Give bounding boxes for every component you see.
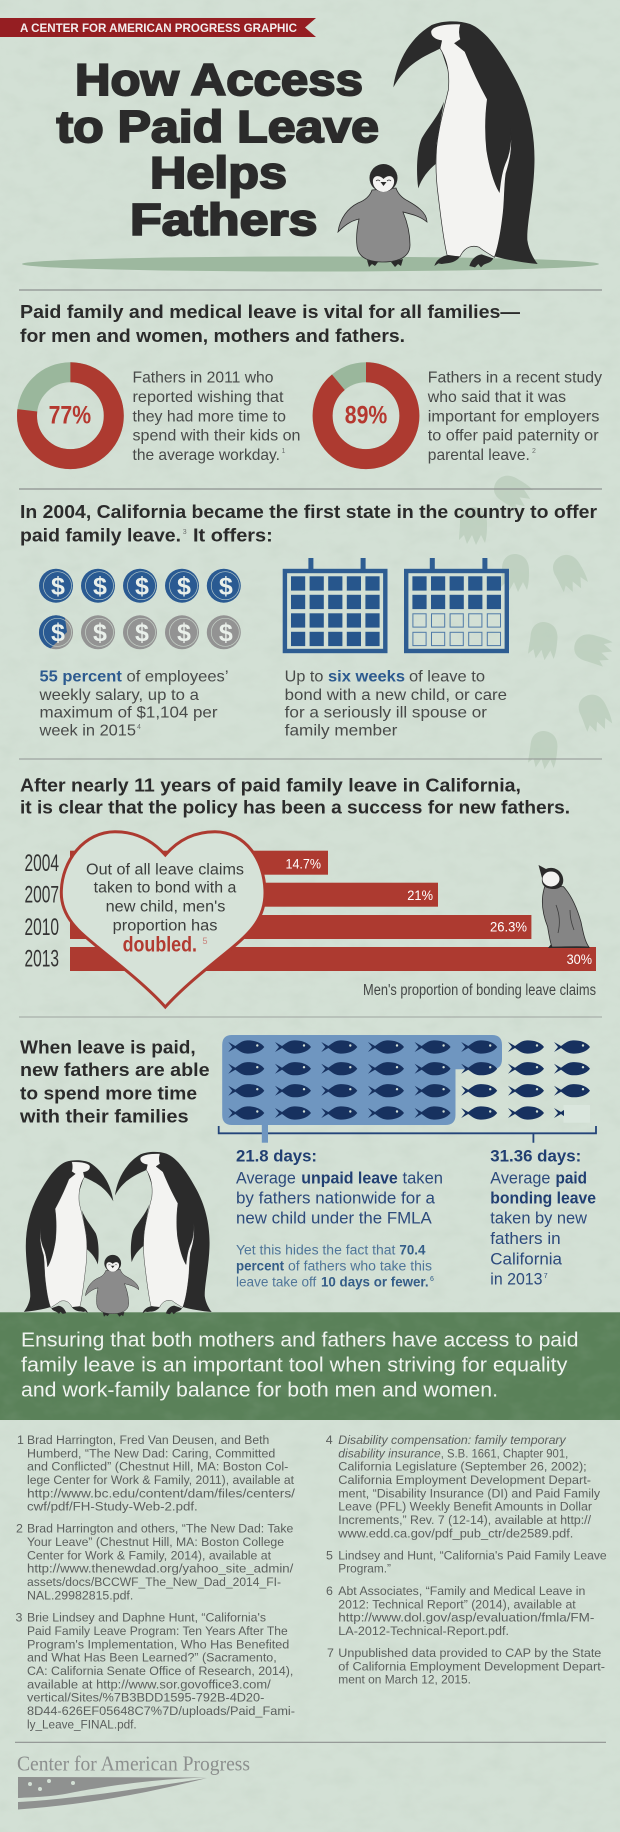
callout: heart: Out of all leave claims: [86, 861, 244, 878]
callout: heart: doubled.: [123, 934, 197, 957]
footnotes: right column: Abt Associates, “Family and Medical Leave in: [338, 1584, 585, 1598]
bar chart: men's proportion of bonding leave claims: 2007: [24, 882, 59, 909]
text: 89% description: to offer paid paternity or: [428, 428, 599, 445]
bar chart: men's proportion of bonding leave claims: 14.7%: [286, 855, 321, 871]
bar chart: men's proportion of bonding leave claims: 30%: [567, 951, 592, 967]
text: 89% description: 2: [532, 448, 536, 455]
text: 21.8 days unpaid leave: new child under the FMLA: [236, 1210, 432, 1228]
ribbon: source label: A CENTER FOR AMERICAN PROGRESS GRAPHIC: [20, 21, 297, 35]
footnotes: right column: of California Employment Development Depart-: [338, 1659, 605, 1673]
text: 21.8 days unpaid leave: by fathers nationwide for a: [236, 1189, 436, 1207]
text: 55 percent of salary: of employees’: [126, 669, 228, 686]
ribbon: source label: [0, 18, 316, 37]
text: 77% description: spend with their kids on: [132, 428, 300, 445]
icon: coins showing 55 percent: $: [51, 572, 65, 600]
footnotes: right column: Increments,” Rev. 7 (12-14), available at http://: [338, 1513, 592, 1527]
bar chart: men's proportion of bonding leave claims: 2004: [24, 850, 59, 877]
text: 77% description: they had more time to: [132, 408, 286, 425]
heading: policy success: it is clear that the policy has been a success for new fathers.: [20, 797, 570, 817]
heading: paid leave is vital: for men and women, mothers and fathers.: [20, 326, 405, 346]
footnotes: left column: http://www.thenewdad.org/yahoo_site_admin/: [27, 1562, 294, 1576]
text: six weeks of leave: of leave to: [409, 669, 485, 686]
bracket: fish scale: [219, 1125, 596, 1143]
icon: full calendar: [285, 558, 385, 651]
heading: when leave is paid: with their families: [19, 1106, 189, 1126]
text: six weeks of leave: family member: [285, 723, 398, 740]
logo: Center for American Progress: [17, 1752, 250, 1810]
bar chart: men's proportion of bonding leave claims: 2010: [24, 914, 59, 941]
text: 70.4 percent note: leave take off: [236, 1275, 317, 1290]
bar chart: men's proportion of bonding leave claims: [24, 850, 596, 973]
footnotes: left column: 2: [16, 1522, 23, 1536]
bar chart: men's proportion of bonding leave claims: 26.3%: [490, 919, 527, 935]
text: 55 percent of salary: [38, 669, 228, 740]
text: 31.36 days paid leave: Average: [490, 1169, 550, 1187]
footnotes: left column: available at http://www.sor.govoffice3.com/: [27, 1677, 271, 1691]
text: 31.36 days paid leave: fathers in: [490, 1230, 561, 1248]
text: 77% description: reported wishing that: [132, 389, 284, 406]
icon: coins showing 55 percent: $: [135, 619, 149, 647]
footnotes: left column: http://www.bc.edu/content/dam/files/centers/: [27, 1486, 296, 1500]
text: 70.4 percent note: Yet this hides the fact that: [236, 1242, 396, 1257]
text: six weeks of leave: Up to: [285, 669, 323, 686]
footnotes: right column: 2012: Technical Report” (2014), available at: [338, 1597, 576, 1611]
heading: California first state: In 2004, California became the first state in the country to offer: [20, 502, 597, 522]
text: 21.8 days unpaid leave: Average: [236, 1169, 296, 1187]
text: 70.4 percent note: 10 days or fewer.: [321, 1275, 429, 1290]
text: 70.4 percent note: 6: [430, 1276, 434, 1283]
text: 77% description: 1: [282, 448, 286, 455]
text: 70.4 percent note: 70.4: [399, 1242, 426, 1257]
callout: heart: 5: [202, 936, 208, 946]
text: 21.8 days unpaid leave: unpaid leave: [301, 1169, 398, 1187]
text: 89% description: important for employers: [428, 408, 599, 425]
panel: green conclusion band: family leave is an important tool when striving for equality: [21, 1355, 567, 1377]
footnotes: right column: ment on March 12, 2015.: [338, 1673, 471, 1687]
footnotes: left column: lege Center for Work & Family, 2011), available at: [27, 1473, 295, 1487]
footnotes: left column: Your Leave” (Chestnut Hill, MA: Boston College: [27, 1535, 284, 1549]
footnotes: right column: , S.B. 1661, Chapter 901,: [441, 1446, 568, 1460]
footnotes: left column: and Conflicted” (Chestnut Hill, MA: Boston Col-: [27, 1460, 288, 1474]
text: 55 percent of salary: weekly salary, up to a: [38, 687, 199, 704]
text: 89% description: [427, 370, 602, 464]
footnotes: left column: 8D44-626EF05648C7%7D/uploads/Paid_Fami-: [27, 1704, 295, 1718]
footnotes: right column: Program.”: [338, 1562, 391, 1576]
heading: California first state: [20, 502, 597, 546]
footnotes: left column: [16, 1433, 296, 1731]
panel: green conclusion band: and work-family balance for both men and women.: [21, 1380, 498, 1402]
icon: coins showing 55 percent: $: [177, 572, 191, 600]
donut chart: 89%: 89%: [345, 401, 387, 429]
footnotes: left column: vertical/Sites/%7B3BDD1595-792B-4D20-: [27, 1691, 264, 1705]
text: 77% description: Fathers in 2011 who: [132, 370, 274, 387]
title: [56, 56, 379, 245]
callout: heart: [61, 832, 265, 1007]
footnotes: left column: Paid Family Leave Program: Ten Years After The: [27, 1624, 288, 1638]
text: 55 percent of salary: 4: [137, 724, 141, 731]
heading: policy success: [20, 776, 570, 817]
footnotes: left column: cwf/pdf/FH-Study-Web-2.pdf.: [27, 1500, 198, 1514]
footnotes: right column: [326, 1433, 607, 1687]
title: to Paid Leave: [56, 103, 379, 152]
footnotes: left column: NAL.29982815.pdf.: [27, 1588, 133, 1602]
footnotes: right column: http://www.dol.gov/asp/evaluation/fmla/FM-: [338, 1611, 594, 1625]
logo: Center for American Progress: Center for American Progress: [17, 1752, 250, 1776]
icon: penguin chick looking up: [538, 865, 590, 948]
footnotes: left column: Program's Implementation, Who Has Benefited: [27, 1637, 289, 1651]
footnotes: left column: Center for Work & Family, 2014), available at: [27, 1548, 272, 1562]
text: 31.36 days paid leave: taken by new: [490, 1210, 587, 1228]
heading: when leave is paid: to spend more time: [20, 1083, 197, 1103]
footnotes: left column: assets/docs/BCCWF_The_New_Dad_2014_FI-: [27, 1575, 281, 1589]
text: 21.8 days unpaid leave: taken: [402, 1169, 443, 1187]
text: 55 percent of salary: maximum of $1,104 per: [40, 705, 218, 722]
footnotes: left column: Humberd, “The New Dad: Caring, Committed: [27, 1446, 275, 1460]
text: 77% description: the average workday.: [132, 447, 280, 464]
icon: coins showing 55 percent: $: [219, 572, 233, 600]
footnotes: right column: Disability compensation: family temporary: [338, 1433, 566, 1447]
text: 31.36 days paid leave: 7: [544, 1273, 548, 1280]
text: 21.8 days unpaid leave: [236, 1147, 443, 1228]
icon: coins showing 55 percent: $: [219, 619, 233, 647]
heading: California first state: 3: [183, 529, 187, 536]
title: Helps: [150, 149, 287, 198]
heading: California first state: paid family leave.: [20, 526, 181, 546]
footnotes: right column: Leave (PFL) Weekly Benefit Amounts in Dollar: [338, 1500, 592, 1514]
ground shadow: [22, 256, 599, 272]
heading: policy success: After nearly 11 years of paid family leave in California,: [20, 776, 521, 796]
icon: coins showing 55 percent: $: [135, 572, 149, 600]
callout: heart: new child, men's: [106, 899, 226, 916]
bar chart: men's proportion of bonding leave claims: 21%: [407, 887, 433, 903]
background footprints: [459, 470, 615, 770]
donut chart: 77%: 77%: [49, 401, 91, 429]
text: six weeks of leave: [285, 669, 507, 740]
footnotes: left column: Brad Harrington, Fred Van Deusen, and Beth: [27, 1433, 269, 1447]
donut chart: 77%: [27, 372, 114, 459]
text: 31.36 days paid leave: in 2013: [490, 1271, 542, 1289]
footnotes: right column: 4: [326, 1433, 333, 1447]
footnotes: right column: Unpublished data provided to CAP by the State: [338, 1646, 601, 1660]
footnotes: right column: California Legislature (September 26, 2002);: [338, 1460, 587, 1474]
icon: coins showing 55 percent: $: [177, 619, 191, 647]
footnotes: right column: 6: [326, 1584, 333, 1598]
text: 21.8 days unpaid leave: 21.8 days:: [236, 1147, 317, 1166]
text: 31.36 days paid leave: bonding leave: [490, 1189, 596, 1207]
text: 55 percent of salary: week in 2015: [38, 723, 136, 740]
footnotes: right column: disability insurance: [338, 1446, 441, 1460]
footnotes: left column: 3: [16, 1610, 22, 1624]
donut chart: 89%: [323, 372, 409, 459]
footnotes: right column: ment, “Disability Insurance (DI) and Paid Family: [338, 1486, 601, 1500]
text: 89% description: parental leave.: [428, 447, 530, 464]
text: six weeks of leave: bond with a new child, or care: [285, 687, 507, 704]
heading: paid leave is vital: Paid family and medical leave is vital for all families—: [20, 302, 520, 322]
text: 31.36 days paid leave: [490, 1147, 596, 1289]
heading: when leave is paid: [19, 1037, 210, 1126]
fish pictogram: days of leave: [222, 1035, 590, 1125]
icon: coins showing 55 percent: $: [51, 619, 65, 647]
text: 89% description: Fathers in a recent study: [428, 370, 602, 387]
text: 89% description: who said that it was: [427, 389, 566, 406]
text: 31.36 days paid leave: 31.36 days:: [490, 1147, 581, 1166]
icon: coins showing 55 percent: $: [93, 619, 107, 647]
footnotes: left column: ly_Leave_FINAL.pdf.: [27, 1717, 137, 1731]
footnotes: left column: CA: California Senate Office of Research, 2014),: [27, 1664, 293, 1678]
text: 70.4 percent note: of fathers who take this: [288, 1259, 432, 1274]
text: 31.36 days paid leave: California: [490, 1250, 563, 1268]
text: 70.4 percent note: percent: [236, 1259, 285, 1274]
footnotes: left column: 1: [17, 1433, 24, 1447]
text: 31.36 days paid leave: paid: [556, 1169, 587, 1187]
text: six weeks of leave: for a seriously ill spouse or: [285, 705, 488, 722]
callout: heart: taken to bond with a: [94, 880, 237, 897]
footnotes: right column: 7: [327, 1646, 334, 1660]
panel: green conclusion band: [0, 1312, 620, 1420]
footnotes: right column: 5: [326, 1548, 333, 1562]
icon: penguin family: [24, 1152, 212, 1317]
title: How Access: [75, 56, 363, 105]
footnotes: left column: Brad Harrington and others, “The New Dad: Take: [27, 1522, 293, 1536]
icon: coins showing 55 percent: [39, 569, 241, 649]
heading: California first state: It offers:: [193, 526, 273, 546]
text: six weeks of leave: six weeks: [328, 669, 405, 686]
heading: when leave is paid: new fathers are able: [20, 1060, 210, 1080]
heading: paid leave is vital: [20, 302, 520, 346]
icon: baby penguin: [338, 164, 427, 267]
footnotes: right column: California Employment Development Depart-: [338, 1473, 591, 1487]
footnotes: right column: Lindsey and Hunt, “California's Paid Family Leave: [338, 1548, 607, 1562]
footnotes: left column: and What Has Been Learned?” (Sacramento,: [27, 1651, 277, 1665]
text: 77% description: [132, 370, 300, 464]
title: Fathers: [130, 196, 318, 245]
footnotes: left column: Brie Lindsey and Daphne Hunt, “California's: [27, 1610, 266, 1624]
text: 70.4 percent note: [236, 1242, 434, 1290]
text: 55 percent of salary: 55 percent: [40, 669, 122, 686]
panel: green conclusion band: Ensuring that both mothers and fathers have access to paid: [21, 1330, 578, 1352]
footnotes: right column: LA-2012-Technical-Report.pdf.: [338, 1624, 509, 1638]
icon: coins showing 55 percent: $: [93, 572, 107, 600]
icon: partial calendar: [406, 558, 507, 651]
icon: father penguin: [393, 21, 538, 267]
heading: when leave is paid: When leave is paid,: [20, 1037, 196, 1057]
bar chart: men's proportion of bonding leave claims: 2013: [24, 946, 59, 973]
callout: heart: proportion has: [113, 918, 218, 935]
footnotes: right column: www.edd.ca.gov/pdf_pub_ctr/de2589.pdf.: [337, 1526, 573, 1540]
